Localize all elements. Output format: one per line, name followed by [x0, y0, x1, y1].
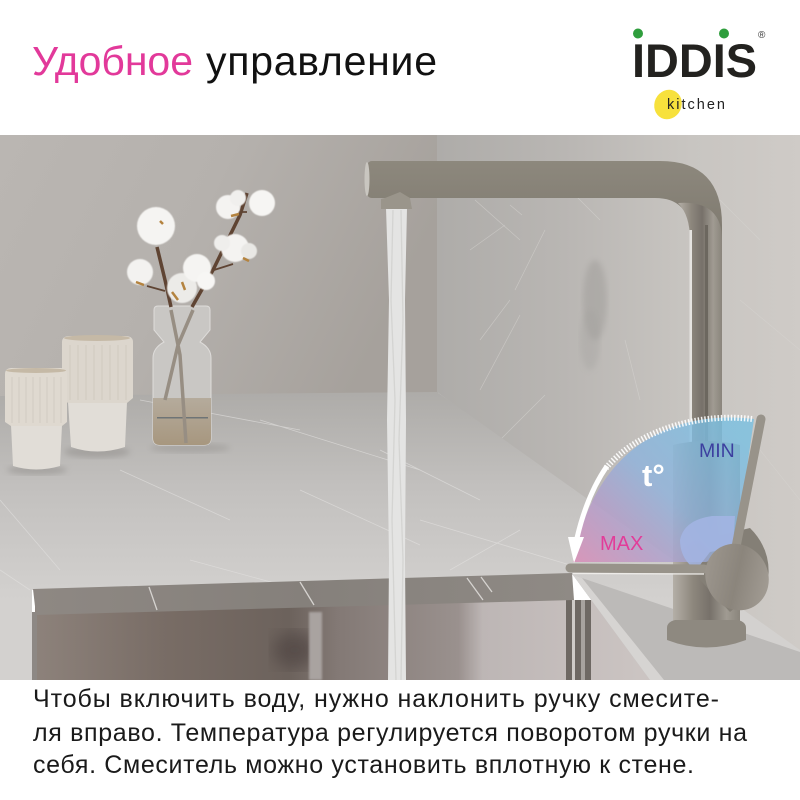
cotton flowers — [127, 190, 275, 303]
title: Удобное — [32, 38, 193, 84]
label t°: t° — [642, 458, 665, 493]
handle hub — [700, 528, 769, 612]
counter side return — [573, 575, 800, 680]
description text: ля вправо. Температура регулируется поворотом ручки на — [33, 719, 747, 747]
lever: MIN position — [735, 419, 761, 552]
logo: IDDIS kitchen: IDDIS — [632, 34, 757, 87]
lever: MAX position — [570, 568, 704, 574]
faucet spout — [368, 161, 722, 238]
faucet vertical pipe — [678, 202, 722, 442]
label MIN: MIN — [699, 440, 735, 462]
cup: large — [62, 335, 133, 458]
counter front edge — [33, 573, 574, 615]
description text — [33, 685, 747, 779]
faucet base ring — [667, 620, 746, 648]
temperature fan — [568, 418, 754, 565]
tick scale — [606, 418, 752, 468]
sink — [30, 600, 655, 680]
water stream — [386, 208, 407, 680]
spout tip — [364, 162, 370, 196]
aerator — [381, 192, 412, 209]
hub overlay — [680, 516, 735, 565]
countertop — [0, 392, 800, 680]
faucet — [364, 161, 769, 648]
vase with stems — [147, 193, 247, 453]
logo: IDDIS kitchen: kitchen — [667, 97, 725, 113]
white arrow — [568, 466, 607, 563]
description text: Чтобы включить воду, нужно наклонить ручку смесите- — [33, 685, 719, 713]
handle disk — [705, 544, 769, 610]
side marble wall — [437, 135, 800, 660]
logo: IDDIS kitchen — [632, 28, 766, 124]
photo: kitchen scene — [0, 135, 800, 680]
back wall — [0, 135, 438, 405]
faucet body — [673, 441, 740, 625]
logo: IDDIS kitchen: ® — [758, 30, 766, 41]
label MAX: MAX — [600, 533, 643, 555]
description text: себя. Смеситель можно установить вплотную к стене. — [33, 751, 694, 779]
cup: small — [5, 368, 67, 475]
title: управление — [206, 38, 437, 84]
